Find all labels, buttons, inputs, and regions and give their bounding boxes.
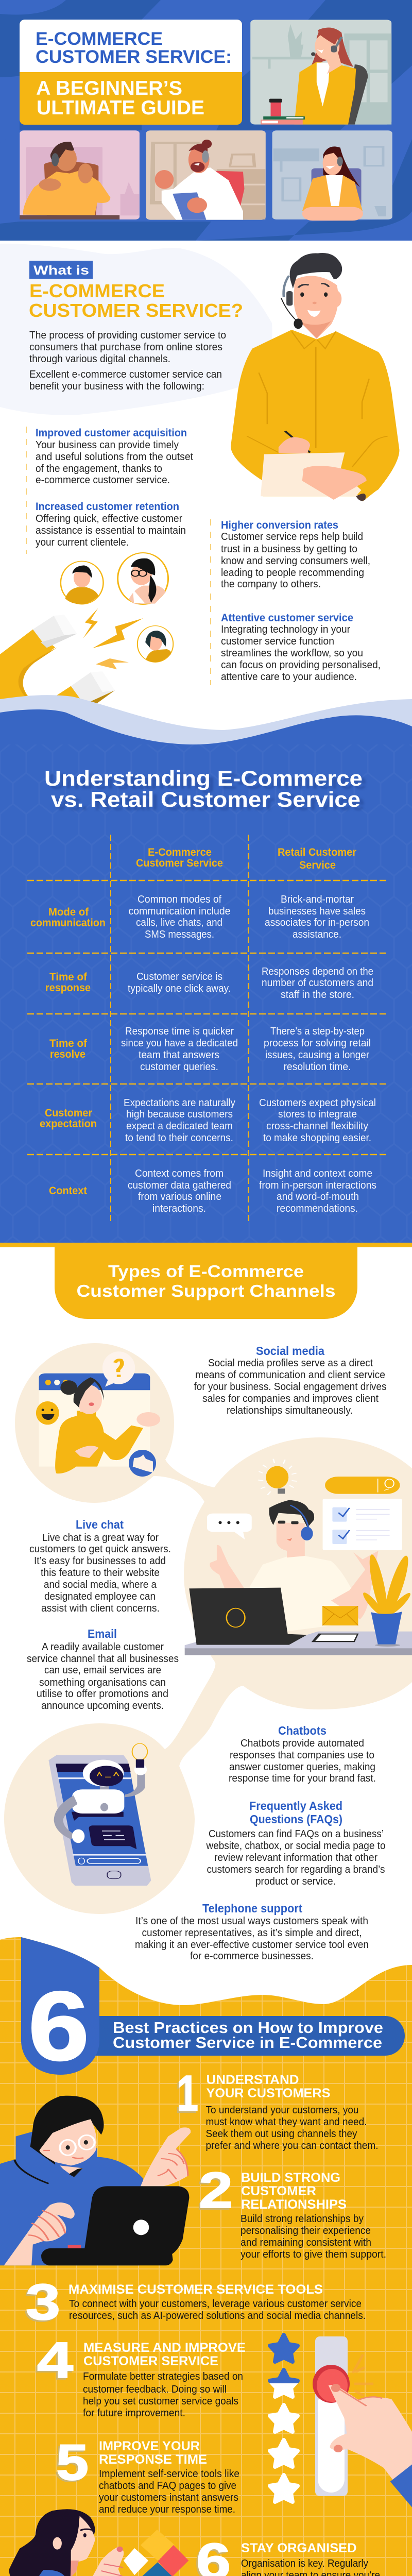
table row: context: recommendations. (277, 1203, 358, 1214)
practice 4: measure and improve customer service: MEASURE AND IMPROVE (83, 2341, 246, 2355)
table header row: E-Commerce (148, 846, 212, 858)
channel: social media: Social media profiles serve as a direct (208, 1358, 373, 1369)
practice 4: measure and improve customer service: Formulate better strategies based on (83, 2371, 243, 2382)
intro text (29, 330, 226, 392)
table row: context (49, 1168, 376, 1214)
icon: checklist card (323, 1499, 402, 1550)
practice 2: build strong customer relationships: and remaining consistent with (241, 2237, 371, 2248)
practice 2: build strong customer relationships: your efforts to give them support. (241, 2249, 386, 2260)
benefit: attentive customer service: can focus on providing personalised, (221, 659, 381, 671)
intro text: The process of providing customer service to (29, 330, 226, 341)
illustration: star rating and slider (270, 2335, 412, 2507)
portrait: customer 2 (118, 553, 168, 604)
connected blobs background (4, 1343, 412, 1914)
table row: customer expectation: expectation (40, 1118, 97, 1130)
practice 4: measure and improve customer service (37, 2332, 246, 2419)
channel: chatbots: Chatbots (278, 1724, 327, 1737)
channel: frequently asked questions: product or service. (255, 1876, 336, 1887)
practice 5: improve your response time: IMPROVE YOUR (99, 2439, 200, 2453)
benefit: improved customer acquisition: and useful solutions from the outset (36, 451, 193, 463)
benefit: attentive customer service: Integrating technology in your (221, 624, 350, 635)
channel: email: something organisations can (39, 1677, 166, 1688)
practice 2: build strong customer relationships: RELATIONSHIPS (241, 2197, 347, 2212)
icon: chat bubble (89, 1825, 136, 1849)
table row: mode of communication: associates for in-person (265, 917, 369, 928)
heading: CUSTOMER SERVICE? (29, 300, 243, 321)
table row: mode of communication (30, 894, 369, 940)
channel: live chat: and social media, where a (44, 1579, 157, 1590)
channel: email (27, 1627, 179, 1711)
channel: email: A readily available customer (42, 1641, 164, 1653)
channel: live chat: assist with client concerns. (41, 1603, 160, 1614)
channel: live chat: customers to get quick answers. (29, 1544, 171, 1555)
illustration: agent man with pen (20, 130, 140, 219)
heading banner: 6 (28, 1972, 89, 2081)
practice 4: measure and improve customer service: CUSTOMER SERVICE (83, 2354, 218, 2368)
table row: mode of communication: businesses have sales (268, 906, 366, 917)
benefit: increased customer retention: your current clientele. (36, 537, 129, 548)
benefit: increased customer retention: Increased customer retention (36, 500, 179, 513)
illustration: agent woman with arms crossed (272, 130, 392, 221)
table row: customer expectation: cross-channel flexibility (266, 1121, 368, 1132)
illustration: chatbot robot on phone (48, 1743, 151, 1886)
table row: customer expectation: expect a dedicated team (126, 1121, 233, 1132)
benefit: improved customer acquisition: e-commerce customer service. (36, 474, 170, 486)
channel: social media: relationships simultaneously. (227, 1405, 353, 1416)
channel: chatbots: response time for your brand fast. (229, 1773, 376, 1784)
table row: mode of communication: assistance. (293, 929, 341, 940)
table row: context: customer data gathered (128, 1180, 231, 1191)
table header row: Customer Service (136, 857, 223, 869)
benefit: higher conversion rates: know and serving consumers well, (221, 555, 370, 567)
table row: context: from various online (138, 1191, 221, 1202)
table row: time of resolve: issues, causing a longer (265, 1049, 369, 1061)
benefit: attentive customer service: attentive care to your audience. (221, 671, 357, 683)
wave background (0, 695, 412, 773)
icon: plant (360, 1554, 412, 1647)
practice 5: improve your response time: RESPONSE TIME (99, 2452, 207, 2467)
benefit: higher conversion rates: Customer service reps help build (221, 531, 363, 543)
practice 4: measure and improve customer service: customer feedback. Doing so will (83, 2384, 227, 2395)
practice 1: understand your customers: must know what they want and need. (206, 2116, 367, 2128)
practice 5: improve your response time: and reduce your response time. (99, 2504, 235, 2515)
table row: time of resolve (49, 1026, 371, 1073)
table row: time of resolve: team that answers (139, 1049, 219, 1061)
practice 2: build strong customer relationships: Build strong relationships by (241, 2213, 364, 2225)
heading banner: Customer Service in E-Commerce (113, 2033, 382, 2052)
channel: social media: for your business. Social engagement drives (194, 1381, 386, 1393)
benefit: attentive customer service (221, 612, 381, 683)
practice 3: maximise customer service tools: To connect with your customers, leverage various customer service (69, 2298, 362, 2310)
channel: live chat: designated employee can (44, 1591, 156, 1602)
channel: chatbots: Chatbots provide automated (241, 1738, 364, 1749)
benefit: increased customer retention: Offering quick, effective customer (36, 513, 182, 524)
channel: telephone support: customer representatives, as it’s simple and direct, (142, 1927, 362, 1939)
channel: live chat (29, 1518, 171, 1614)
table row: mode of communication: communication (30, 917, 106, 929)
panel: types of customer support channels (0, 1243, 412, 1962)
practice 4: measure and improve customer service: for future improvement. (83, 2408, 185, 2419)
channel: live chat: this feature to their website (41, 1567, 160, 1579)
panel: six best practices (0, 1937, 412, 2576)
heading banner (21, 1937, 405, 2081)
table row: customer expectation: to tend to their concerns. (125, 1132, 233, 1144)
title card (20, 20, 242, 125)
table row: time of response: typically one click away. (128, 983, 231, 994)
table row: mode of communication: Mode of (48, 906, 89, 918)
heading: Understanding E-Commerce (44, 766, 363, 790)
practice 5: improve your response time (56, 2434, 239, 2515)
table row: time of resolve: There’s a step-by-step (270, 1026, 365, 1037)
channel: frequently asked questions: Frequently Asked (249, 1799, 342, 1812)
icon: slider (313, 2336, 373, 2496)
table row: time of resolve: process for solving retail (264, 1038, 371, 1049)
table row: mode of communication: calls, live chats, and (136, 917, 222, 928)
icon: laptop (189, 1588, 307, 1645)
icon: lightning bolts (83, 608, 143, 669)
channel: email: Email (88, 1627, 117, 1640)
benefit: improved customer acquisition: of the engagement, thanks to (36, 463, 162, 474)
panel: what is e-commerce customer service (0, 244, 400, 721)
heading (44, 766, 363, 811)
heading: What is (33, 263, 89, 278)
table grid (27, 835, 386, 1221)
practice 5: improve your response time: your customers instant answers (99, 2492, 238, 2503)
table row: time of response: Customer service is (136, 971, 222, 982)
benefit: higher conversion rates: trust in a business by getting to (221, 544, 357, 555)
heading: E-COMMERCE (29, 280, 165, 301)
table row: customer expectation: high because customers (126, 1109, 233, 1120)
intro text: through various digital channels. (29, 353, 170, 365)
intro text: benefit your business with the following: (29, 381, 204, 392)
table row: time of response: response (45, 982, 91, 994)
table row: customer expectation: Customer (45, 1107, 92, 1119)
table row: time of resolve: Response time is quicker (125, 1026, 234, 1037)
illustration: agent with headset and notes (231, 253, 400, 501)
table row: customer expectation: Customers expect physical (259, 1097, 376, 1109)
channel: frequently asked questions: Questions (FAQs) (250, 1812, 342, 1826)
benefit: improved customer acquisition: Improved customer acquisition (36, 427, 187, 439)
channel: live chat: Live chat is a great way for (42, 1532, 159, 1544)
header panel (0, 0, 412, 241)
benefit: attentive customer service: customer service function (221, 636, 334, 647)
table row: context: Insight and context come (263, 1168, 372, 1179)
portrait: customer 1 (61, 561, 104, 604)
table row: context: and word-of-mouth (277, 1191, 359, 1202)
channel: chatbots: answer customer queries, making (229, 1761, 375, 1773)
practice 3: maximise customer service tools: 3 (26, 2274, 60, 2330)
channel: live chat: Live chat (76, 1518, 124, 1531)
table row: mode of communication: communication include (129, 906, 231, 917)
channel: telephone support (135, 1902, 369, 1962)
table row: time of response: staff in the store. (281, 989, 354, 1001)
title card: E-COMMERCE (36, 29, 163, 49)
heading tab: Types of E-Commerce (108, 1262, 304, 1281)
benefit: increased customer retention (36, 500, 186, 548)
practice 4: measure and improve customer service: help you set customer service goals (83, 2396, 238, 2407)
practice 1: understand your customers: Seek them out using channels they (206, 2128, 357, 2140)
table row: mode of communication: SMS messages. (145, 929, 214, 940)
icon: smiley (36, 1401, 59, 1425)
practice 5: improve your response time: chatbots and FAQ pages to give (99, 2480, 236, 2492)
illustration: woman with social media window (36, 1351, 160, 1477)
practice 1: understand your customers: YOUR CUSTOMERS (206, 2086, 331, 2100)
illustration: woman with puzzle pieces (9, 2509, 188, 2576)
table row: customer expectation: to make shopping easier. (263, 1132, 371, 1144)
table row: time of response: Time of (49, 971, 88, 983)
benefit: higher conversion rates: the company to others. (221, 579, 321, 590)
heading tab (0, 1243, 412, 1319)
background blob (0, 244, 272, 415)
practice 1: understand your customers: prefer and where you can contact them. (206, 2140, 378, 2151)
table row: context: from in-person interactions (259, 1180, 376, 1191)
channel: frequently asked questions: customers search for regarding a brand’s (207, 1864, 385, 1875)
title card: CUSTOMER SERVICE: (36, 47, 232, 67)
intro text: Excellent e-commerce customer service can (29, 369, 222, 380)
practice 2: build strong customer relationships: personalising their experience (241, 2225, 371, 2236)
practice 3: maximise customer service tools: resources, such as AI-powered solutions and social media channels. (69, 2310, 366, 2321)
table header row: Retail Customer (278, 846, 356, 858)
panel: comparison table (0, 695, 412, 1243)
practice 3: maximise customer service tools: MAXIMISE CUSTOMER SERVICE TOOLS (68, 2282, 323, 2297)
illustration: agent man with clipboard (146, 130, 266, 220)
practice 1: understand your customers: To understand your customers, you (206, 2105, 358, 2116)
practice 1: understand your customers (177, 2065, 378, 2151)
title card: A BEGINNER’S (36, 77, 182, 99)
table row: time of resolve: customer queries. (140, 1061, 218, 1073)
illustration: live chat agent at laptop (185, 1459, 412, 1655)
benefit: attentive customer service: streamlines the workflow, so you (221, 648, 363, 659)
channel: frequently asked questions (206, 1799, 385, 1887)
table row: customer expectation: stores to integrate (278, 1109, 357, 1120)
table row: customer expectation: Expectations are naturally (124, 1097, 235, 1109)
benefit: higher conversion rates: Higher conversion rates (221, 519, 338, 531)
benefit: attentive customer service: Attentive customer service (221, 612, 353, 624)
channel: telephone support: It’s one of the most usual ways customers speak with (135, 1916, 368, 1927)
practice 1: understand your customers: 1 (177, 2065, 198, 2122)
channel: social media: sales for companies and improves client (202, 1393, 379, 1404)
icon: phone (48, 1755, 151, 1886)
practice 4: measure and improve customer service: 4 (37, 2332, 73, 2388)
channel: telephone support: making it an ever-effective customer service tool even (135, 1939, 369, 1951)
practice 2: build strong customer relationships: BUILD STRONG (241, 2171, 340, 2185)
practice 1: understand your customers: UNDERSTAND (206, 2073, 299, 2087)
table row: time of response: number of customers and (262, 977, 373, 989)
icon: star rating (270, 2335, 298, 2502)
benefit: higher conversion rates (221, 519, 370, 590)
channel: social media (194, 1344, 386, 1416)
benefit: increased customer retention: assistance is essential to maintain (36, 525, 186, 536)
benefit: improved customer acquisition (26, 427, 211, 685)
channel: frequently asked questions: review relevant information that other (214, 1852, 377, 1863)
heading (29, 261, 243, 321)
table row: time of resolve: Time of (49, 1038, 88, 1049)
table row: time of resolve: resolution time. (283, 1061, 351, 1073)
practice 6: stay organised: Organisation is key. Regularly (241, 2558, 368, 2569)
table row: context: Context comes from (135, 1168, 224, 1179)
channel: live chat: It’s easy for businesses to add (34, 1555, 166, 1567)
icon: horseshoe magnet (0, 615, 115, 721)
practice 5: improve your response time: 5 (56, 2434, 89, 2490)
practice 6: stay organised: STAY ORGANISED (241, 2541, 356, 2555)
illustration: customers portraits and magnet (0, 553, 173, 721)
channel: chatbots (229, 1724, 376, 1784)
channel: telephone support: Telephone support (202, 1902, 302, 1915)
illustration: man in hoodie at laptop (0, 2096, 191, 2265)
title card: ULTIMATE GUIDE (37, 97, 204, 119)
benefit: improved customer acquisition: Your business can provide timely (36, 439, 179, 451)
channel: email: service channel that all businesses (27, 1653, 179, 1665)
icon: desk (185, 1632, 412, 1655)
table row: context: interactions. (152, 1203, 206, 1214)
icon: robot (54, 1743, 147, 1843)
practice 5: improve your response time: Implement self-service tools like (99, 2468, 239, 2480)
portrait: customer 3 (138, 626, 173, 662)
channel: chatbots: responses that companies use to (230, 1750, 374, 1761)
channel: social media: means of communication and client service (195, 1369, 385, 1381)
icon: envelope (322, 1606, 358, 1625)
practice 6: stay organised (196, 2533, 380, 2576)
heading banner: Best Practices on How to Improve (113, 2019, 383, 2037)
icon: light bulb (258, 1459, 297, 1495)
channel: frequently asked questions: website, chatbox, or social media page to (206, 1840, 385, 1852)
table row: time of response (45, 966, 373, 1001)
icon: puzzle (124, 2530, 188, 2576)
illustration: agent woman on phone (250, 20, 391, 125)
icon: question speech bubble (102, 1351, 135, 1387)
table row: time of resolve: since you have a dedicated (121, 1038, 238, 1049)
table row: time of resolve: resolve (50, 1048, 85, 1060)
icon: typing speech bubble (207, 1514, 252, 1539)
practice 2: build strong customer relationships (199, 2162, 386, 2260)
table header row: Service (299, 859, 336, 871)
heading tab: Customer Support Channels (76, 1281, 336, 1300)
channel: email: announce upcoming events. (41, 1700, 164, 1711)
heading: vs. Retail Customer Service (51, 787, 360, 811)
icon: laptop (41, 2186, 189, 2265)
benefit: higher conversion rates: leading to people recommending (221, 567, 364, 579)
practice 2: build strong customer relationships: CUSTOMER (241, 2184, 316, 2198)
channel: frequently asked questions: Customers can find FAQs on a business’ (209, 1828, 384, 1840)
table header row (136, 846, 356, 871)
icon: thumbs up (129, 1450, 156, 1477)
icon: tablet (312, 1634, 358, 1642)
icon: hand pressing button (329, 2384, 412, 2507)
table row: context: Context (49, 1185, 87, 1197)
table row: mode of communication: Brick-and-mortar (281, 894, 354, 905)
channel: telephone support: for e-commerce businesses. (190, 1951, 314, 1962)
intro text: consumers that purchase from online stores (29, 342, 222, 353)
table row: customer expectation (40, 1097, 376, 1144)
practice 2: build strong customer relationships: 2 (199, 2162, 233, 2218)
channel: email: utilise to offer promotions and (37, 1688, 168, 1700)
table row: time of response: Responses depend on the (262, 966, 373, 977)
icon: search bar (325, 1477, 400, 1494)
table row: mode of communication: Common modes of (138, 894, 221, 905)
channel: social media: Social media (256, 1344, 324, 1358)
channel: email: can use, email services are (44, 1665, 161, 1676)
practice 3: maximise customer service tools (26, 2274, 366, 2330)
